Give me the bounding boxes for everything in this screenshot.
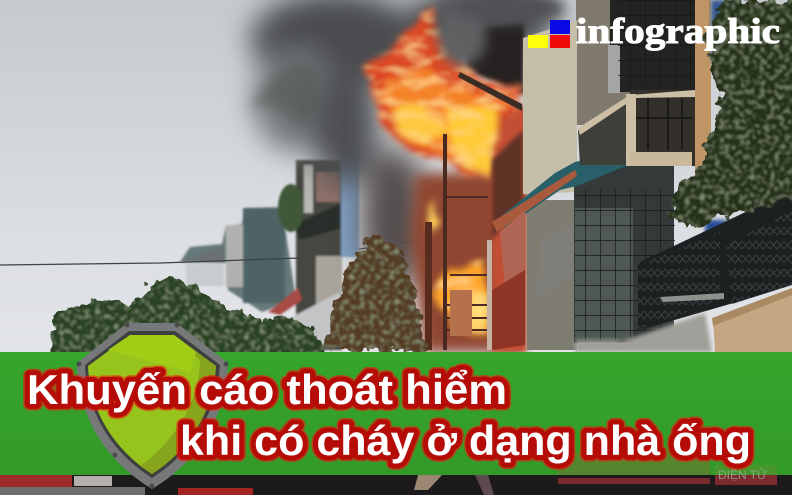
tan wall lower right (713, 290, 792, 352)
logo icon: colored squares (528, 20, 570, 48)
distant hazy buildings (180, 207, 296, 312)
tree branches in smoke (250, 62, 319, 125)
neighbouring house with balconies (268, 145, 359, 350)
title (27, 366, 751, 464)
street scene under band (0, 475, 792, 495)
title line 2: khi có cháy ở dạng nhà ống (180, 417, 751, 464)
blue shutter (711, 0, 733, 60)
bare tree in front of fire (325, 235, 425, 352)
burning grille (492, 130, 523, 240)
title line 1: Khuyến cáo thoát hiểm (27, 366, 507, 413)
black smoke (250, 0, 555, 292)
watermark: Pháp luật điện tử: ĐIỆN TỬ (718, 467, 767, 482)
smoke over flame (430, 0, 565, 66)
foliage at right (668, 0, 792, 230)
fire (368, 12, 522, 335)
power line (0, 240, 420, 265)
tree at left (48, 279, 325, 358)
black railing (638, 190, 792, 330)
shield rivets (76, 322, 228, 488)
title band (0, 352, 792, 475)
house on fire background (410, 120, 525, 352)
charred beams and poles (425, 72, 522, 350)
title line 1: Khuyến cáo thoát hiểm (27, 366, 507, 413)
icon: shield (76, 322, 228, 489)
balcony (578, 0, 695, 166)
logo wordmark: infographic (576, 11, 780, 51)
fire glow (466, 292, 490, 332)
street debris under awning (575, 313, 712, 352)
tube houses at right (492, 0, 695, 350)
watermark: Pháp luật điện tử (558, 452, 777, 482)
orange column (695, 0, 711, 210)
title line 2: khi có cháy ở dạng nhà ống (180, 417, 751, 464)
logo: infographic (528, 11, 780, 51)
